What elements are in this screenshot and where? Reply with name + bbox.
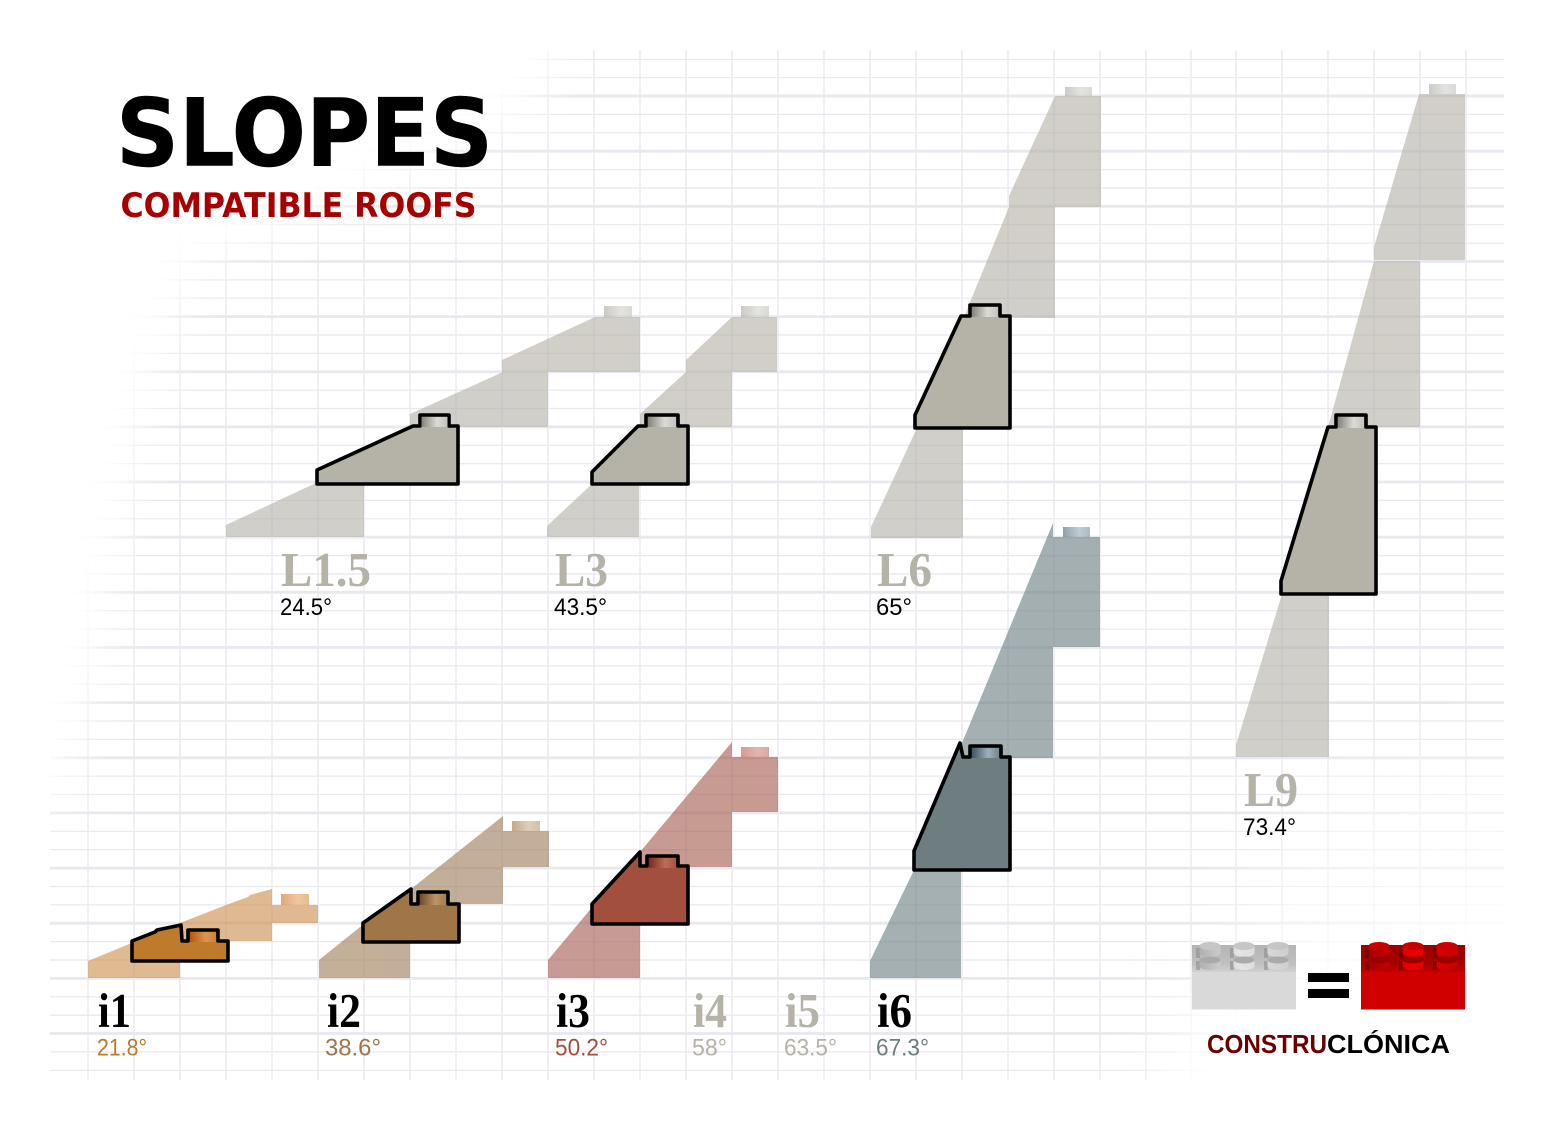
label: i2: i2 — [327, 983, 361, 1038]
label: L3: 43.5° — [554, 594, 607, 621]
icon: red brick — [1361, 942, 1465, 1010]
label: i4: 58° — [692, 1034, 727, 1062]
label: L9: 73.4° — [1243, 814, 1296, 841]
brick: L3 — [592, 415, 688, 484]
label: L1.5: L1.5 — [281, 542, 371, 597]
label: L6: 65° — [876, 594, 912, 621]
brick: L6 — [915, 305, 1010, 428]
title: SLOPES — [116, 80, 493, 188]
label: i1: i1 — [98, 983, 131, 1038]
ghost stack: L6 — [871, 87, 1101, 538]
label: i3 — [555, 983, 608, 1062]
label: L1.5 — [280, 542, 371, 621]
icon: gray brick — [1192, 942, 1296, 1010]
subtitle: COMPATIBLE ROOFS — [120, 186, 476, 226]
logo wordmark — [1207, 1029, 1450, 1059]
logo wordmark: CONSTRU — [1207, 1029, 1327, 1059]
label: i2: 38.6° — [325, 1034, 381, 1062]
label: i1: 21.8° — [97, 1034, 147, 1062]
brick: L9 — [1281, 415, 1376, 594]
ghost stack: i3 — [548, 742, 778, 978]
label: L1.5: 24.5° — [280, 594, 332, 621]
label: i1 — [97, 983, 147, 1062]
label: L6 — [876, 542, 932, 621]
label: i3: i3 — [556, 983, 590, 1038]
label: L3: L3 — [555, 542, 608, 597]
ghost stack: i1 — [88, 889, 318, 978]
label: i4 — [692, 983, 727, 1062]
brick: i2 — [363, 889, 459, 942]
label: L9: L9 — [1244, 762, 1298, 817]
logo wordmark: CLÓNICA — [1327, 1029, 1450, 1059]
label: L3 — [554, 542, 608, 621]
label: i5: i5 — [785, 983, 820, 1038]
ghost stack: L9 — [1236, 84, 1465, 757]
label: i4: i4 — [693, 983, 727, 1038]
ghost stack: L1.5 — [226, 306, 640, 537]
ghost stack: L3 — [547, 306, 777, 537]
label: i6 — [876, 983, 929, 1062]
label: i5: 63.5° — [784, 1034, 837, 1062]
label: L9 — [1243, 762, 1298, 841]
brick: i6 — [914, 743, 1010, 870]
brick: i3 — [592, 852, 688, 924]
label: i6: i6 — [877, 983, 912, 1038]
label: i3: 50.2° — [555, 1034, 608, 1062]
brick: L1.5 — [317, 415, 458, 484]
ghost stack: i2 — [319, 816, 549, 978]
label: i2 — [325, 983, 381, 1062]
label: L6: L6 — [877, 542, 932, 597]
brick: i1 — [132, 925, 228, 961]
ghost stack: i6 — [870, 523, 1100, 978]
label: i5 — [784, 983, 837, 1062]
label: i6: 67.3° — [876, 1034, 929, 1062]
icon: equals sign — [1308, 973, 1349, 998]
